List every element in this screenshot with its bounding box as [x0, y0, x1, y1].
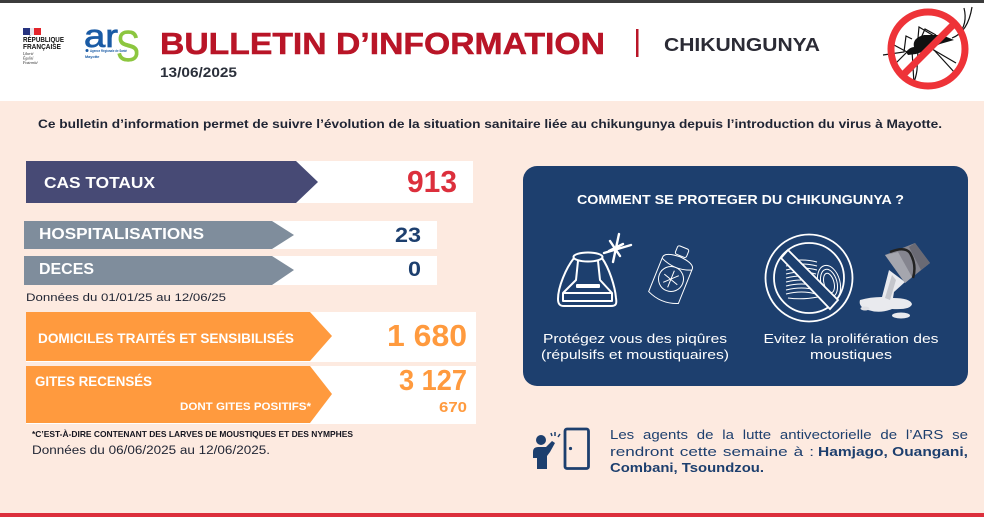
caption: prevention: moustiques [810, 347, 893, 362]
caption: prevention [764, 331, 939, 362]
title: BULLETIN D’INFORMATION [160, 26, 605, 61]
caption: prevention: Evitez la prolifération des [764, 331, 939, 346]
logo: République Française: RÉPUBLIQUE [23, 35, 64, 44]
stat: gites recensés: GITES RECENSÉS [35, 374, 152, 389]
agents text [610, 427, 968, 475]
stat: deces: DECES [39, 261, 94, 278]
stat: domiciles traités [26, 312, 476, 362]
logo: ARS: ar [84, 18, 118, 54]
panel heading: COMMENT SE PROTEGER DU CHIKUNGUNYA ? [577, 192, 904, 207]
agents text: rendront cette semaine à : [610, 444, 814, 459]
logo: République Française: Égalité [22, 56, 34, 60]
stat: domiciles traités: DOMICILES TRAITÉS ET SENSIBILISÉS [38, 331, 294, 346]
logo: ARS [84, 18, 140, 71]
header band [0, 0, 984, 101]
caption: protection: Protégez vous des piqûres [543, 331, 728, 346]
stat: deces [24, 256, 437, 285]
stat: gites recensés [26, 365, 476, 424]
logo: République Française: Fraternité [22, 61, 38, 65]
caption: protection [541, 331, 729, 362]
panel: protection [523, 166, 968, 386]
stat: hospitalisations: 23 [395, 224, 421, 247]
logo: ARS: S [116, 22, 140, 71]
divider [636, 29, 638, 57]
icon: mosquito net [558, 252, 616, 306]
subject: chikungunya: CHIKUNGUNYA [664, 34, 820, 55]
logo: République Française: Liberté [22, 52, 34, 56]
logo: ARS: Mayotte [85, 55, 99, 59]
logo: République Française [22, 28, 64, 65]
date: 13/06/2025 [160, 65, 238, 80]
footer band [0, 513, 984, 517]
stat: gites recensés: 670 [439, 400, 467, 416]
data period: cases: Données du 01/01/25 au 12/06/25 [26, 292, 226, 304]
data period: gites: Données du 06/06/2025 au 12/06/2025. [32, 445, 270, 457]
stat: gites recensés: DONT GITES POSITIFS* [180, 401, 312, 413]
logo: ARS: Agence Régionale de Santé [90, 49, 127, 53]
stat: deces: 0 [408, 258, 421, 281]
agents text: Combani, Tsoundzou. [610, 460, 764, 475]
stat: gites recensés: 3 127 [399, 365, 467, 397]
logo: République Française: FRANÇAISE [23, 44, 61, 51]
icon: repellent spray [647, 241, 699, 307]
agents text: Les agents de la lutte antivectorielle de l’ARS se [610, 427, 968, 442]
stat: hospitalisations [24, 221, 437, 249]
icon: bucket pouring water [860, 243, 930, 318]
stat: cas totaux: CAS TOTAUX [44, 175, 155, 192]
intro text: Ce bulletin d’information permet de suivre l’évolution de la situation sanitaire liée au chikungunya depuis l’introduction du virus à Mayotte. [38, 119, 942, 131]
icon: mosquito flying [604, 234, 631, 262]
agents text: Hamjago, Ouangani, [818, 444, 968, 459]
stat: hospitalisations: HOSPITALISATIONS [39, 226, 204, 243]
icon: agent knocking at door [533, 429, 588, 469]
stat: cas totaux [26, 161, 473, 203]
stat: cas totaux: 913 [407, 164, 457, 199]
footnote: *C’EST-À-DIRE CONTENANT DES LARVES DE MOUSTIQUES ET DES NYMPHES [32, 429, 353, 439]
icon: no standing water in tyres [766, 234, 852, 322]
icon: crossed-out mosquito [883, 7, 972, 86]
stat: domiciles traités: 1 680 [387, 318, 467, 353]
caption: protection: (répulsifs et moustiquaires) [541, 347, 729, 362]
